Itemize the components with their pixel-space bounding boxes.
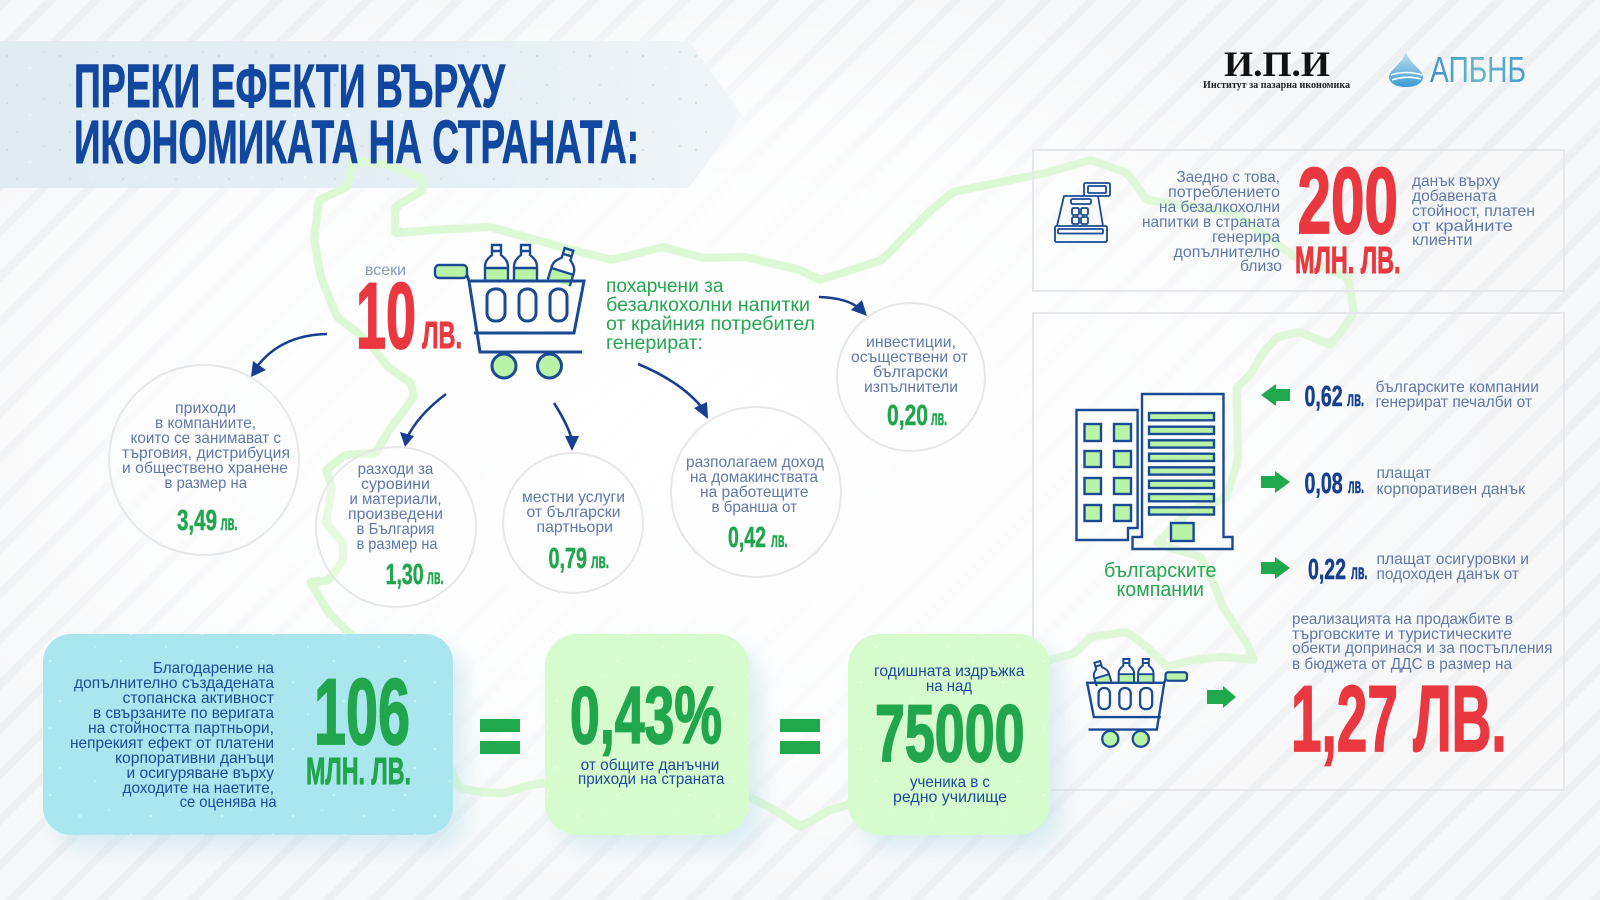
arrow: sales to VAT	[1207, 686, 1236, 708]
circle: trade revenue: и обществено хранене	[122, 460, 288, 477]
panel: 75000 students: на над	[926, 678, 973, 695]
circle: trade revenue: 3,49	[177, 505, 217, 537]
arrow: to raw materials	[400, 394, 446, 447]
circle: disposable income: лв.	[771, 529, 788, 552]
text: VAT intro: генерира	[1212, 229, 1280, 246]
text: VAT description: клиенти	[1412, 232, 1472, 249]
circle: raw materials: суровини	[361, 476, 430, 493]
number: 106: 106	[314, 659, 410, 764]
text: spent on soft drinks	[606, 276, 815, 354]
text: VAT from sales: търговските и туристическите	[1292, 626, 1512, 643]
text: VAT from sales: обекти допринася и за постъпления	[1292, 640, 1552, 657]
text: spent on soft drinks: похарчени за	[606, 276, 724, 297]
logo: IPI: Институт за пазарна икономика	[1203, 79, 1350, 91]
title banner	[0, 41, 742, 188]
row: corporate tax 0,08: лв.	[1348, 475, 1364, 498]
panel: 0,43%	[545, 634, 761, 849]
row: social security 0,22: плащат осигуровки и	[1376, 551, 1529, 568]
text: VAT intro: напитки в страната	[1142, 214, 1280, 231]
text: indirect effect: се оценява на	[180, 794, 277, 811]
logo: APBNB	[1389, 49, 1526, 90]
row: social security 0,22: подоходен данък от	[1376, 566, 1520, 583]
text: VAT from sales	[1292, 611, 1552, 673]
text: VAT description: добавената	[1412, 188, 1497, 205]
title	[74, 52, 639, 176]
text: indirect effect: допълнително създадената	[74, 675, 274, 692]
circle: raw materials: и материали,	[350, 491, 442, 508]
panel: companies box	[1033, 313, 1564, 790]
text: VAT from sales: реализацията на продажбите в	[1292, 611, 1513, 628]
panel: 75000 students: ученика в с	[910, 774, 990, 791]
circle: local services: 0,79	[548, 543, 587, 575]
logo: IPI: И.П.И	[1224, 44, 1330, 84]
arrow: to trade revenue	[251, 334, 327, 377]
circle: investments: 0,20	[887, 400, 928, 432]
text: spent on soft drinks: генерират:	[606, 333, 703, 354]
circle: raw materials: 1,30	[386, 559, 424, 591]
circle: raw materials: лв.	[427, 566, 444, 589]
circle: raw materials: произведени	[348, 506, 443, 523]
circle: trade revenue: в размер на	[164, 475, 247, 492]
number: 106: МЛН. ЛВ.	[306, 751, 411, 793]
circle: raw materials: в размер на	[356, 536, 438, 553]
circle: disposable income: на домакинствата	[690, 469, 818, 486]
row: corporate tax 0,08: 0,08	[1304, 468, 1343, 500]
text: spent on soft drinks: безалкохолни напитки	[606, 295, 810, 316]
row: social security 0,22: 0,22	[1308, 554, 1346, 586]
circle: disposable income	[671, 407, 841, 577]
text: indirect effect: стопанска активност	[122, 690, 275, 707]
arrow: to disposable income	[638, 364, 708, 419]
row: profits 0,62: българските компании	[1376, 379, 1539, 396]
label: bulgarian companies: компании	[1116, 579, 1204, 601]
circle: raw materials	[316, 447, 476, 607]
text: VAT from sales: в бюджета от ДДС в размер на	[1292, 656, 1512, 673]
row: profits 0,62	[1261, 379, 1539, 413]
text: VAT intro	[1142, 169, 1282, 275]
title: ПРЕКИ ЕФЕКТИ ВЪРХУ	[74, 52, 506, 120]
row: corporate tax 0,08: корпоративен данък	[1376, 481, 1526, 498]
row: social security 0,22	[1261, 551, 1529, 586]
map outline of Bulgaria	[310, 160, 1354, 827]
label: every 10 leva: ЛВ.	[422, 315, 462, 357]
row: social security 0,22: лв.	[1351, 561, 1368, 584]
icon: small shopping cart	[1087, 659, 1187, 747]
circle: trade revenue: лв.	[220, 512, 238, 535]
text: spent on soft drinks: от крайния потребител	[606, 314, 815, 335]
label: bulgarian companies	[1104, 560, 1216, 601]
arrow: to investments	[819, 297, 867, 316]
number: 200 million	[1295, 148, 1400, 282]
text: indirect effect	[70, 660, 277, 811]
title: ИКОНОМИКАТА НА СТРАНАТА:	[74, 108, 639, 176]
text: VAT intro: близо	[1240, 258, 1282, 275]
panel: 75000 students: годишната издръжка	[874, 663, 1025, 680]
text: VAT intro: на безалкохолни	[1159, 199, 1280, 216]
text: VAT description	[1412, 173, 1535, 249]
text: indirect effect: в свързаните по веригата	[93, 705, 274, 722]
text: VAT intro: потреблението	[1168, 184, 1280, 201]
row: corporate tax 0,08	[1261, 465, 1526, 500]
circle: local services: местни услуги	[522, 489, 625, 506]
label: bulgarian companies: българските	[1104, 560, 1216, 582]
row: profits 0,62: лв.	[1347, 388, 1364, 411]
text: VAT intro: Заедно с това,	[1176, 169, 1280, 186]
row: profits 0,62: генерират печалби от	[1376, 394, 1533, 411]
label: every 10 leva: 10	[356, 263, 416, 368]
circle: disposable income: разполагаем доход	[686, 454, 825, 471]
circle: investments	[837, 303, 985, 451]
number: 106	[306, 659, 411, 793]
panel: 0,43%: приходи на страната	[578, 771, 725, 788]
label: every 10 leva: всеки	[365, 262, 406, 279]
text: VAT description: от крайните	[1412, 218, 1513, 235]
text: VAT intro: допълнително	[1174, 244, 1280, 261]
row: profits 0,62: 0,62	[1304, 381, 1343, 413]
circle: trade revenue: които се занимават с	[130, 430, 281, 447]
circle: investments: осъществени от	[851, 349, 969, 366]
circle: trade revenue: приходи	[175, 400, 236, 417]
text: indirect effect: на стойността партньори,	[88, 720, 274, 737]
circle: investments: лв.	[931, 407, 947, 430]
number: 200 million: МЛН. ЛВ.	[1295, 240, 1400, 282]
circle: raw materials: разходи за	[358, 461, 433, 478]
panel: 75000 students	[848, 634, 1062, 849]
text: indirect effect: непрекият ефект от платени	[70, 735, 274, 752]
circle: trade revenue	[109, 365, 299, 555]
panel: 0,43%: от общите данъчни	[581, 757, 719, 774]
circle: investments: инвестиции,	[866, 334, 956, 351]
circle: local services: от български	[526, 504, 620, 521]
logo: IPI	[1203, 44, 1350, 91]
panel: 75000 students: редно училище	[893, 789, 1007, 806]
text: indirect effect: и осигуряване върху	[126, 765, 274, 782]
circle: disposable income: на работещите	[700, 484, 809, 501]
circle: disposable income: в бранша от	[712, 499, 798, 516]
circle: local services: партньори	[536, 519, 613, 536]
row: corporate tax 0,08: плащат	[1376, 465, 1432, 482]
text: VAT description: данък върху	[1412, 173, 1500, 190]
number: 200 million: 200	[1298, 148, 1398, 253]
icon: cash register	[1055, 183, 1110, 242]
circle: investments: изпълнители	[864, 379, 958, 396]
text: indirect effect: Благодарение на	[153, 660, 274, 677]
circle: investments: български	[873, 364, 948, 381]
circle: local services	[503, 453, 643, 593]
panel: 106 million	[43, 634, 465, 849]
panel: 0,43%: 0,43%	[570, 671, 722, 761]
logo: APBNB: АПБНБ	[1430, 49, 1526, 90]
circle: local services: лв.	[591, 550, 609, 573]
circle: trade revenue: в компаниите,	[155, 415, 256, 432]
equals sign	[780, 719, 820, 754]
panel: VAT box	[1033, 148, 1564, 291]
equals sign	[480, 719, 520, 754]
text: indirect effect: доходите на наетите,	[122, 780, 274, 797]
text: indirect effect: корпоративни данъци	[115, 750, 274, 767]
arrow: to local services	[554, 403, 579, 451]
circle: trade revenue: търговия, дистрибуция	[122, 445, 290, 462]
panel: 75000 students: 75000	[875, 689, 1024, 779]
circle: disposable income: 0,42	[728, 522, 766, 554]
circle: raw materials: в България	[356, 521, 434, 538]
icon: shopping cart with bottles	[435, 245, 584, 378]
icon: company buildings	[1076, 394, 1232, 549]
text: VAT description: стойност, платен	[1412, 203, 1535, 220]
